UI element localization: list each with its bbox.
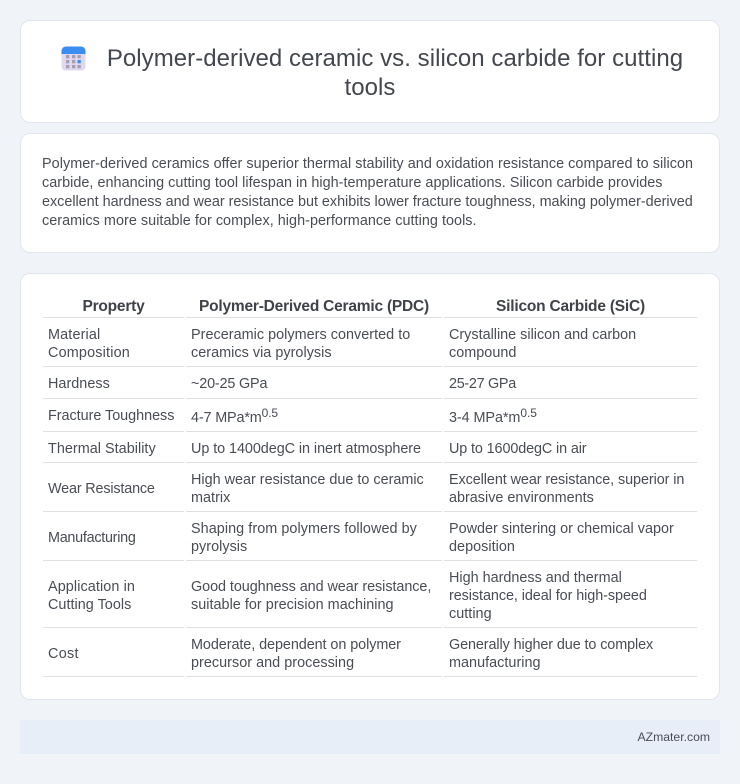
row: manufacturing: pyrolysis xyxy=(191,539,247,555)
row: manufacturing xyxy=(48,521,674,555)
row: manufacturing: deposition xyxy=(449,539,515,555)
row: thermal stability: Up to 1400degC in inert atmosphere xyxy=(191,441,421,457)
title: Polymer-derived ceramic vs. silicon carbide for cutting xyxy=(107,45,683,72)
row: thermal stability: Up to 1600degC in air xyxy=(449,441,586,457)
row: thermal stability xyxy=(48,441,586,457)
row: wear resistance: High wear resistance due to ceramic xyxy=(191,472,424,488)
icon: calendar xyxy=(62,46,86,70)
row: material composition: Preceramic polymers converted to xyxy=(191,327,410,343)
row: material composition: ceramics via pyrolysis xyxy=(191,345,332,361)
row: application in cutting tools: cutting xyxy=(449,606,492,622)
panel: comparison table xyxy=(20,273,720,700)
row: cost: Generally higher due to complex xyxy=(449,637,653,653)
row: wear resistance: Wear Resistance xyxy=(48,481,155,497)
row: wear resistance: abrasive environments xyxy=(449,490,594,506)
row: manufacturing: Shaping from polymers followed by xyxy=(191,521,417,537)
row: fracture toughness: 3-4 MPa*m0.5 xyxy=(449,406,537,426)
row: hardness: Hardness xyxy=(48,376,110,392)
row: cost: precursor and processing xyxy=(191,655,354,671)
title: tools xyxy=(345,74,395,101)
row: fracture toughness xyxy=(48,406,537,426)
row: material composition: Crystalline silicon and carbon xyxy=(449,327,636,343)
row: fracture toughness: 4-7 MPa*m0.5 xyxy=(191,406,278,426)
panel: summary text: carbide, enhancing cutting tool lifespan in high-temperature applications. Silicon carbide provides xyxy=(42,175,663,191)
row: cost xyxy=(48,637,653,671)
row: fracture toughness: Fracture Toughness xyxy=(48,408,174,424)
row: material composition xyxy=(48,327,636,361)
row: application in cutting tools: resistance, ideal for high-speed xyxy=(449,588,647,604)
table header: Polymer-Derived Ceramic (PDC) xyxy=(199,298,429,315)
row: wear resistance: matrix xyxy=(191,490,230,506)
title xyxy=(107,45,683,101)
row: application in cutting tools: Application in xyxy=(48,579,135,595)
row: wear resistance: Excellent wear resistance, superior in xyxy=(449,472,684,488)
row: application in cutting tools xyxy=(48,570,647,622)
row: cost: Cost xyxy=(48,646,79,662)
row: cost: Moderate, dependent on polymer xyxy=(191,637,401,653)
table header: Silicon Carbide (SiC) xyxy=(496,298,645,315)
panel: summary text: Polymer-derived ceramics offer superior thermal stability and oxidation resistance compared to silicon xyxy=(42,156,693,172)
row: material composition: Material xyxy=(48,327,100,343)
row: application in cutting tools: Cutting Tools xyxy=(48,597,131,613)
row: material composition: compound xyxy=(449,345,516,361)
panel: summary text xyxy=(20,133,720,253)
panel: summary text: excellent hardness and wear resistance but exhibits lower fracture toughness, making polymer-derived xyxy=(42,194,693,210)
row: application in cutting tools: suitable for precision machining xyxy=(191,597,394,613)
panel: summary text: ceramics more suitable for complex, high-performance cutting tools. xyxy=(42,213,477,229)
footer text: AZmater.com xyxy=(638,730,710,744)
row: manufacturing: Powder sintering or chemical vapor xyxy=(449,521,674,537)
row: hardness: 25-27 GPa xyxy=(449,376,516,392)
footer bar xyxy=(20,720,720,754)
row: material composition: Composition xyxy=(48,345,130,361)
panel: title card xyxy=(20,20,720,123)
row: cost: manufacturing xyxy=(449,655,541,671)
row: application in cutting tools: High hardness and thermal xyxy=(449,570,622,586)
row: manufacturing: Manufacturing xyxy=(48,530,136,546)
table header: Property xyxy=(82,298,145,315)
row: thermal stability: Thermal Stability xyxy=(48,441,156,457)
row: wear resistance xyxy=(48,472,684,506)
row: hardness: ~20-25 GPa xyxy=(191,376,267,392)
row: hardness xyxy=(48,376,516,392)
table header xyxy=(82,298,645,315)
row: application in cutting tools: Good toughness and wear resistance, xyxy=(191,579,431,595)
